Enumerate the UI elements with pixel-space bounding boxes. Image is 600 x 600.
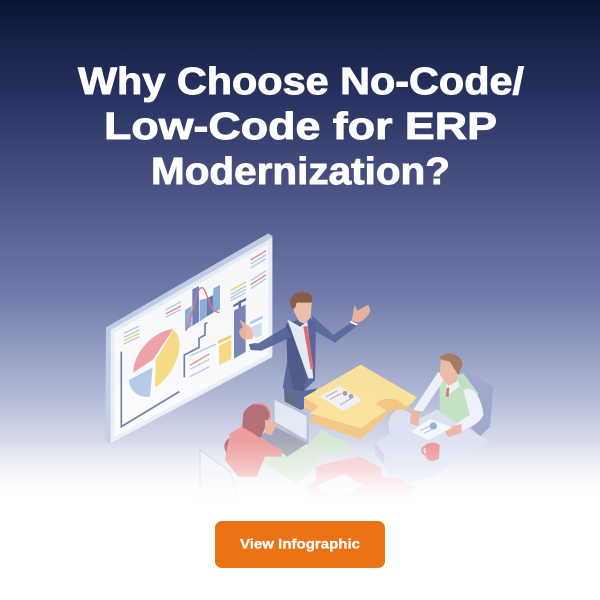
woman body xyxy=(225,427,282,477)
illustration: presentation board xyxy=(105,233,272,444)
column shapes xyxy=(218,298,263,366)
seated man shirt and arms xyxy=(413,372,445,412)
presenter pointing arm xyxy=(248,327,292,351)
seated man head xyxy=(440,360,460,386)
light blue puzzle piece xyxy=(375,409,489,483)
title: Modernization? xyxy=(151,151,450,193)
chair at left xyxy=(200,450,238,497)
red puzzle piece xyxy=(305,457,417,497)
presenter xyxy=(239,292,370,413)
bottom fade overlay xyxy=(0,440,600,500)
red mug xyxy=(422,443,440,461)
presenter raised arm xyxy=(312,315,358,343)
presenter legs xyxy=(284,388,302,413)
tablet on table xyxy=(411,419,453,440)
seated man hands xyxy=(410,409,420,426)
illustration: meeting scene xyxy=(200,292,493,498)
bar chart with curve xyxy=(185,285,220,331)
line groups xyxy=(124,251,266,377)
document on red piece xyxy=(315,474,363,498)
presenter shirt xyxy=(287,319,313,378)
document on yellow piece xyxy=(320,386,362,411)
button xyxy=(215,521,385,568)
board face xyxy=(111,237,272,443)
presenter tie xyxy=(303,326,314,369)
presenter pointing hand xyxy=(239,319,253,340)
woman arm and hand xyxy=(265,420,277,435)
seated man xyxy=(410,354,483,437)
step line xyxy=(184,323,207,377)
seated man chair xyxy=(463,368,493,437)
button label: View Infographic xyxy=(240,536,361,552)
woman hair xyxy=(224,403,271,459)
presenter torso xyxy=(283,317,316,392)
seated woman xyxy=(224,403,282,477)
presenter hand right xyxy=(352,305,370,323)
woman headset xyxy=(255,404,270,420)
yellow puzzle piece xyxy=(304,365,417,439)
title: Low-Code for ERP xyxy=(104,106,497,148)
axes xyxy=(121,352,179,427)
title xyxy=(78,61,524,193)
title: Why Choose No-Code/ xyxy=(78,61,524,103)
green puzzle piece xyxy=(262,430,350,484)
board frame xyxy=(105,233,272,444)
pie chart xyxy=(129,329,179,397)
laptop xyxy=(260,395,309,457)
presenter head xyxy=(293,300,312,324)
seated man torso xyxy=(439,373,478,423)
